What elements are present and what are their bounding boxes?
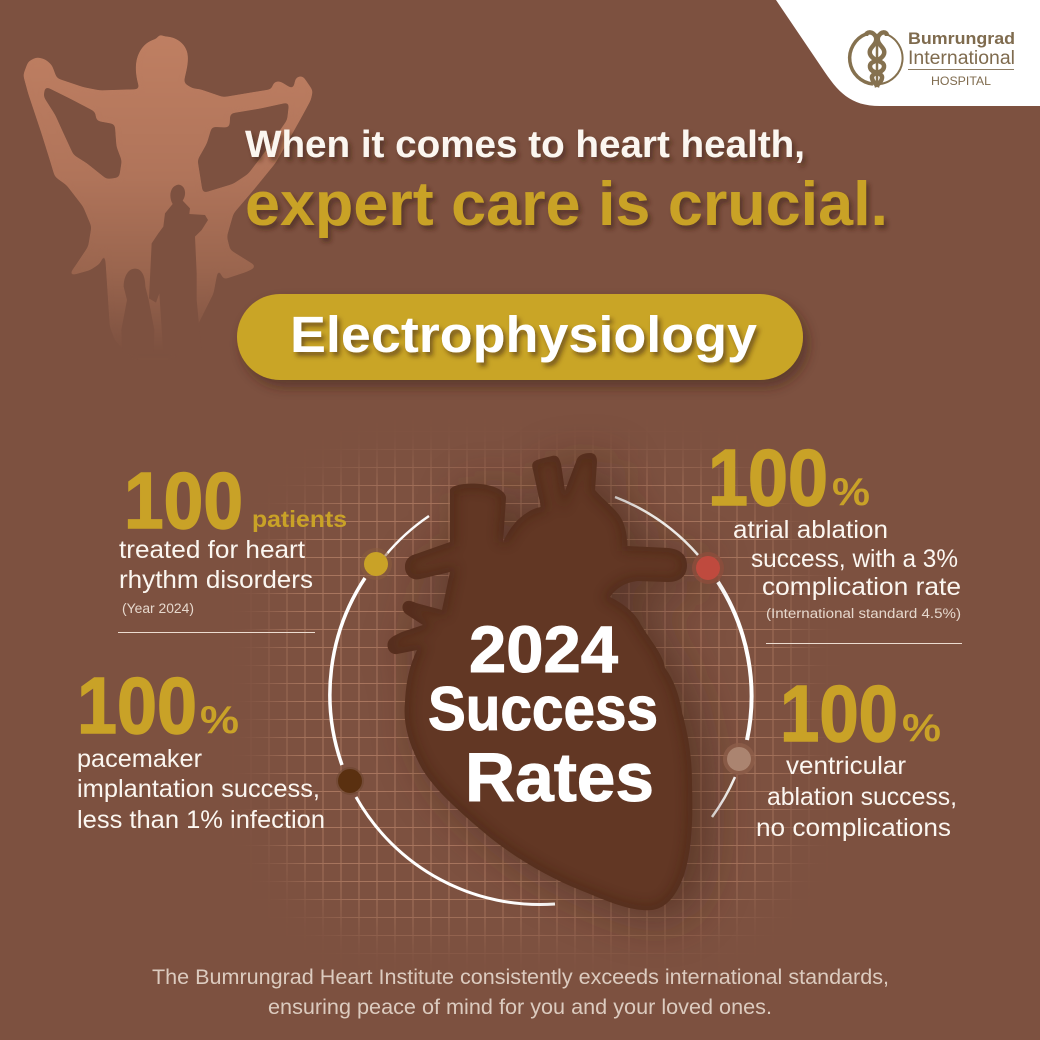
- marker dot: dark brown: [336, 767, 364, 795]
- stat: atrial ablation: 100: [708, 433, 828, 522]
- title line two: expert care is crucial.: [245, 170, 888, 239]
- stat: ventricular ablation: %: [902, 707, 941, 750]
- stat: pacemaker: implantation success,: [77, 775, 320, 803]
- parent carrying child, far away: [149, 185, 208, 353]
- stat: 100 patients: treated for heart: [119, 536, 305, 564]
- stat: atrial ablation: %: [832, 471, 870, 514]
- logo: Bumrungrad International Hospital: HOSPITAL: [931, 74, 991, 88]
- family silhouette: [23, 33, 313, 360]
- title line one: When it comes to heart health,: [245, 124, 805, 166]
- stat: atrial ablation: (International standard 4.5%): [766, 606, 961, 621]
- stat: ventricular ablation: 100: [780, 669, 898, 758]
- heading pill: Electrophysiology: [237, 294, 803, 380]
- heart text: 2024 Success Rates: Rates: [465, 739, 654, 816]
- footer text: The Bumrungrad Heart Institute consistently exceeds international standards,: [152, 966, 889, 989]
- footer text: ensuring peace of mind for you and your loved ones.: [268, 996, 772, 1019]
- stat: pacemaker: less than 1% infection: [77, 806, 325, 834]
- stat: atrial ablation: success, with a 3%: [751, 545, 958, 573]
- footer text: [152, 966, 889, 1019]
- stat: pacemaker: 100: [77, 661, 197, 750]
- stat: ventricular ablation: [756, 669, 957, 842]
- stat: pacemaker: %: [200, 699, 239, 742]
- heart text: 2024 Success Rates: Success: [428, 675, 658, 744]
- grid backdrop: [256, 446, 814, 954]
- logo: Bumrungrad International Hospital: International: [908, 48, 1015, 69]
- stat: 100 patients: rhythm disorders: [119, 566, 313, 594]
- stat: 100 patients: [119, 456, 347, 616]
- stat: atrial ablation: complication rate: [762, 573, 961, 601]
- stat: pacemaker: pacemaker: [77, 745, 202, 773]
- title: [245, 124, 888, 239]
- heart text: 2024 Success Rates: 2024: [469, 612, 618, 686]
- marker dot: tan: [723, 743, 755, 775]
- ring arcs: [330, 497, 752, 905]
- logo panel: white corner tab: [776, 0, 1040, 106]
- marker dot: red: [692, 552, 724, 584]
- heading pill: Electrophysiology: Electrophysiology: [290, 306, 758, 363]
- stat: 100 patients: (Year 2024): [122, 601, 194, 616]
- stat: atrial ablation: [708, 433, 961, 621]
- stat: 100 patients: 100: [124, 456, 243, 545]
- small child, far away: [121, 269, 154, 353]
- child on shoulders: [23, 33, 313, 360]
- stat: ventricular ablation: ablation success,: [767, 783, 957, 811]
- stat: pacemaker: [77, 661, 325, 834]
- marker dot: gold: [360, 548, 392, 580]
- stat: ventricular ablation: no complications: [756, 814, 951, 842]
- logo name: Bumrungrad: [908, 30, 1015, 48]
- logo: Bumrungrad International Hospital: [850, 30, 1015, 88]
- heart text: 2024 Success Rates: [428, 612, 658, 816]
- heart illustration: [387, 453, 708, 918]
- stat: atrial ablation: atrial ablation: [733, 516, 888, 544]
- stat: 100 patients: patients: [252, 506, 347, 532]
- stat: ventricular ablation: ventricular: [786, 752, 906, 780]
- icon: caduceus emblem: [850, 32, 903, 87]
